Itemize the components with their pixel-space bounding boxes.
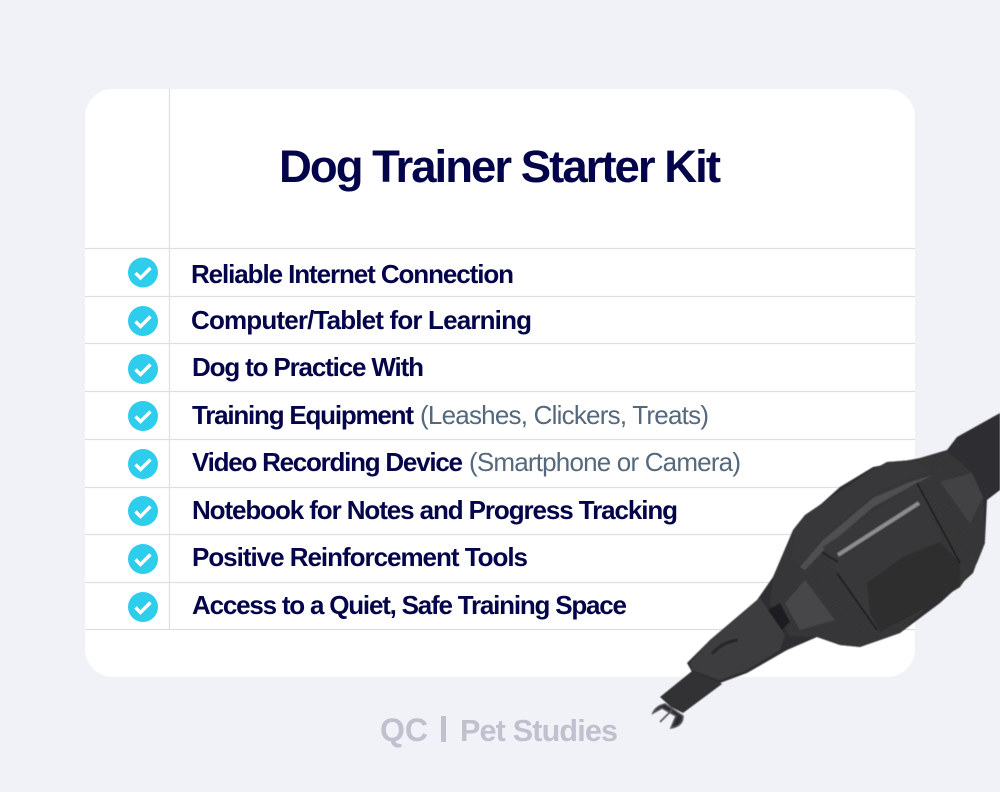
bag waist wing [690,598,785,680]
checklist item 4 [128,400,709,431]
bag side seams [822,483,960,630]
bag right tab [940,473,983,523]
panel: checklist card [85,89,915,677]
bag upper flap band [800,475,933,570]
checklist item 8: Access to a Quiet, Safe Training Space [192,590,627,620]
logo: QC Pet Studies: Pet Studies [460,714,618,748]
checklist item 4: Training Equipment [192,400,414,430]
bag black webbing loop [768,603,790,630]
bag webbing strap [660,667,722,713]
checklist item 2: Computer/Tablet for Learning [191,305,532,335]
icon: black waist bag [653,413,1000,728]
checklist item 6: Notebook for Notes and Progress Tracking [192,495,678,525]
bag zipper [838,503,919,555]
checklist item 4: (Leashes, Clickers, Treats) [420,400,709,430]
bag main body [770,451,985,647]
checklist item 5: (Smartphone or Camera) [469,447,741,477]
checklist item 1: Reliable Internet Connection [191,259,514,289]
bag side tab [785,580,835,630]
checklist item 7: Positive Reinforcement Tools [192,542,528,572]
checklist item 3: Dog to Practice With [192,352,424,382]
bag upper shell [792,460,930,565]
bag buckle [653,704,683,728]
checklist item 5: Video Recording Device [192,447,463,477]
title: Dog Trainer Starter Kit [279,141,721,192]
logo: QC Pet Studies: QC [380,712,428,748]
bag dark lower panel [867,542,960,632]
logo: QC Pet Studies [380,712,618,748]
bag base silhouette [687,413,1000,683]
checklist item 5 [128,447,741,479]
bag front pocket [823,483,943,630]
